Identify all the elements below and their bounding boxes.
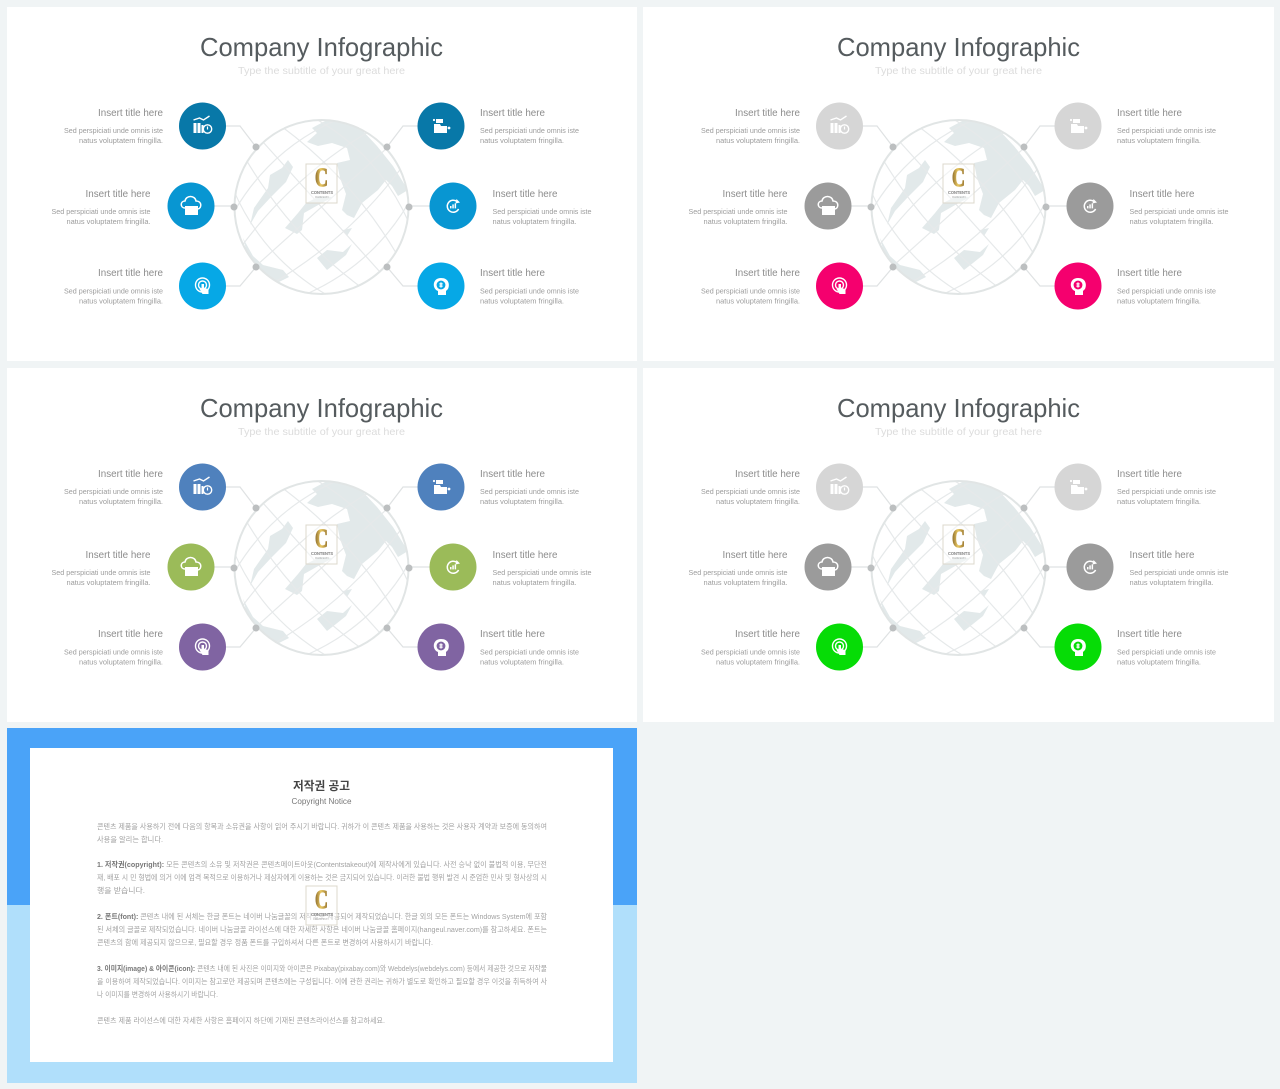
logo — [306, 524, 337, 564]
item: middle right: Insert title here — [492, 189, 558, 200]
item: bottom right — [418, 262, 579, 310]
logo — [943, 524, 974, 564]
copyright body text: 사용을 알리는 합니다. — [97, 834, 163, 844]
item: bottom left — [701, 624, 863, 670]
item: bottom right: Sed perspiciati unde omnis iste — [1117, 286, 1216, 296]
item: bottom left: natus voluptatem fringilla. — [716, 658, 800, 666]
panel: slide 1 blue variant — [7, 7, 637, 361]
item: top left — [701, 102, 863, 150]
logo: CONTENTS — [311, 551, 333, 556]
item: bottom left: Insert title here — [98, 268, 163, 279]
item: middle left: Sed perspiciati unde omnis iste — [52, 568, 150, 577]
subtitle: Type the subtitle of your great here — [238, 426, 405, 438]
item: middle left — [52, 182, 214, 230]
item: top right — [1054, 464, 1216, 510]
title: Company Infographic — [200, 393, 443, 423]
logo: C — [952, 163, 965, 192]
item: top left: Sed perspiciati unde omnis iste — [701, 126, 800, 135]
item: bottom right — [1054, 624, 1216, 670]
copyright body text: 3. 이미지(image) & 아이콘(icon): 콘텐츠 내에 된 사진은 이미지와 아이콘은 Pixabay(pixabay.com)와 Webdelys(webdelys.com) 등에서 제공한 것으로 저작물 — [97, 963, 547, 973]
item: middle right: natus voluptatem fringilla. — [1130, 578, 1214, 587]
logo: CONTENTS — [311, 912, 333, 917]
logo: MADE EASY — [952, 556, 966, 560]
item: middle left: natus voluptatem fringilla. — [704, 578, 788, 587]
copyright body text: 행을 받습니다. — [97, 885, 145, 895]
item: bottom right: Insert title here — [480, 629, 545, 640]
item: middle right: natus voluptatem fringilla. — [492, 217, 576, 226]
item: top left: Sed perspiciati unde omnis iste — [701, 487, 800, 496]
item: top right: Insert title here — [1117, 469, 1182, 480]
item: middle right — [1066, 544, 1228, 590]
logo: CONTENTS — [948, 190, 970, 195]
copyright body text: 2. 폰트(font): 콘텐츠 내에 된 서체는 한글 폰트는 네이버 나눔글꼴의 저작물로 제공되어 제작되었습니다. 한글 외의 모든 폰트는 Windows System에 포함 — [97, 911, 547, 921]
item: bottom left: natus voluptatem fringilla. — [79, 658, 163, 666]
item: middle left: natus voluptatem fringilla. — [704, 217, 788, 226]
item: middle right: natus voluptatem fringilla. — [492, 578, 576, 587]
logo: MADE EASY — [315, 917, 329, 921]
item: top right: Sed perspiciati unde omnis iste — [480, 126, 579, 135]
item: top left: natus voluptatem fringilla. — [79, 136, 163, 145]
connector nodes — [230, 504, 412, 632]
item: top left: natus voluptatem fringilla. — [79, 497, 163, 506]
item: top left: Insert title here — [735, 469, 800, 480]
item: bottom right: Sed perspiciati unde omnis iste — [1117, 648, 1216, 656]
title: Company Infographic — [200, 32, 443, 62]
item: middle right: Sed perspiciati unde omnis iste — [1130, 568, 1228, 577]
item: top right — [418, 464, 579, 510]
item: bottom left: Sed perspiciati unde omnis iste — [701, 286, 800, 296]
item: top right: natus voluptatem fringilla. — [1117, 136, 1201, 145]
connector lines — [851, 126, 1067, 286]
item: middle left — [688, 182, 852, 230]
item: top left: Sed perspiciati unde omnis iste — [64, 126, 163, 135]
item: top right: Sed perspiciati unde omnis iste — [480, 487, 579, 496]
item: middle right: natus voluptatem fringilla. — [1130, 217, 1214, 226]
item: top left: Insert title here — [735, 108, 800, 119]
copyright body text — [97, 821, 547, 1025]
subtitle: Type the subtitle of your great here — [875, 426, 1042, 438]
item: top left: natus voluptatem fringilla. — [716, 136, 800, 145]
logo — [306, 163, 337, 203]
item: top right: natus voluptatem fringilla. — [480, 497, 564, 506]
item: bottom right: natus voluptatem fringilla. — [1117, 658, 1201, 666]
item: middle right — [430, 544, 592, 590]
item: bottom right: Insert title here — [1117, 629, 1182, 640]
item: middle right: Insert title here — [492, 550, 558, 561]
item: middle right: Sed perspiciati unde omnis iste — [492, 568, 592, 577]
item: top right — [1054, 102, 1216, 150]
copyright body text: 1. 저작권(copyright): 모든 콘텐츠의 소유 및 저작권은 콘텐츠메이트아웃(Contentstakeout)에 제작사에게 있습니다. 사전 승낙 없이 불법적 이용, 무단전 — [97, 859, 547, 869]
logo: C — [952, 524, 965, 553]
title: Company Infographic — [837, 393, 1080, 423]
title: Company Infographic — [837, 32, 1080, 62]
item: bottom right: natus voluptatem fringilla. — [480, 296, 564, 306]
connector nodes — [868, 144, 1050, 270]
logo: C — [315, 885, 328, 914]
copyright subheading: Copyright Notice — [292, 796, 352, 806]
copyright body text: 을 이용하여 제작되었습니다. 이미지는 참고로만 제공되며 콘텐츠에는 구성됩니다. 이에 관한 권리는 귀하가 별도로 확인하고 필요할 경우 이것을 취득하여 사 — [97, 976, 547, 986]
copyright body text: 콘텐츠 제품 라이선스에 대한 자세한 사항은 홈페이지 하단에 기재된 콘텐츠라이선스를 참고하세요. — [97, 1015, 385, 1025]
item: top left — [701, 464, 863, 510]
item: middle right — [430, 182, 592, 230]
item: top right: Insert title here — [480, 108, 545, 119]
item: middle right: Insert title here — [1130, 550, 1195, 561]
logo: MADE EASY — [952, 195, 966, 199]
copyright body text: 나 이미지를 변경하여 사용하시기 바랍니다. — [97, 989, 218, 999]
panel: copyright notice slide — [7, 728, 637, 1083]
item: top right — [418, 102, 579, 150]
connector lines — [214, 487, 430, 647]
logo — [306, 885, 337, 925]
item: bottom right: Insert title here — [480, 268, 545, 279]
copyright body text: 콘텐츠 제품을 사용하기 전에 다음의 항목과 소유권을 사항이 읽어 주시기 바랍니다. 귀하가 이 콘텐츠 제품을 사용하는 것은 사용자 계약과 보증에 동의하여 — [97, 821, 547, 831]
item: bottom left — [64, 624, 226, 670]
item: bottom left: Sed perspiciati unde omnis iste — [64, 648, 163, 656]
item: middle left — [688, 544, 852, 590]
item: middle left: Sed perspiciati unde omnis iste — [688, 568, 788, 577]
item: top right: Insert title here — [480, 469, 545, 480]
copyright body text: 재, 배포 시 민 형법에 의거 이에 엄격 목적으로 이용하거나 제삼자에게 이용하는 것은 금지되어 있습니다. 이러한 불법 행위 발견 시 준엄한 민사 및 형사상의 시 — [97, 872, 547, 882]
item: top left: Insert title here — [98, 469, 163, 480]
item: bottom right — [1054, 262, 1216, 310]
item: bottom right: natus voluptatem fringilla. — [1117, 296, 1201, 306]
item: top right: Sed perspiciati unde omnis iste — [1117, 487, 1216, 496]
subtitle: Type the subtitle of your great here — [238, 65, 405, 77]
item: bottom right: natus voluptatem fringilla. — [480, 658, 564, 666]
item: bottom left — [701, 262, 863, 310]
item: bottom right: Insert title here — [1117, 268, 1182, 279]
item: bottom left: Sed perspiciati unde omnis iste — [64, 286, 163, 296]
globe graphic — [192, 438, 451, 698]
item: top right: natus voluptatem fringilla. — [480, 136, 564, 145]
connector lines — [214, 126, 430, 286]
connector nodes — [230, 144, 412, 270]
item: top left — [64, 102, 226, 150]
connector lines — [851, 487, 1067, 647]
item: middle left: Insert title here — [722, 189, 788, 200]
item: bottom left: natus voluptatem fringilla. — [79, 296, 163, 306]
item: middle left: natus voluptatem fringilla. — [66, 217, 150, 226]
item: bottom left — [64, 262, 226, 310]
item: middle right: Sed perspiciati unde omnis iste — [1130, 207, 1228, 216]
globe graphic — [829, 77, 1088, 337]
copyright heading: 저작권 공고 — [293, 778, 350, 793]
item: top left: natus voluptatem fringilla. — [716, 497, 800, 506]
item: middle left: Sed perspiciati unde omnis iste — [688, 207, 788, 216]
item: bottom left: Insert title here — [735, 629, 800, 640]
logo: MADE EASY — [315, 195, 329, 199]
logo: MADE EASY — [315, 556, 329, 560]
item: top right: natus voluptatem fringilla. — [1117, 497, 1201, 506]
globe graphic — [829, 438, 1088, 698]
panel: slide 4 gray and green variant — [643, 368, 1274, 722]
item: middle left: Insert title here — [86, 189, 151, 200]
item: top left: Sed perspiciati unde omnis iste — [64, 487, 163, 496]
globe graphic — [192, 77, 451, 337]
item: middle left: Insert title here — [722, 550, 788, 561]
logo — [943, 163, 974, 203]
subtitle: Type the subtitle of your great here — [875, 65, 1042, 77]
item: middle right: Insert title here — [1130, 189, 1195, 200]
panel: slide 3 blue green purple variant — [7, 368, 637, 722]
logo: C — [315, 524, 328, 553]
item: bottom left: Insert title here — [98, 629, 163, 640]
item: bottom right — [418, 624, 579, 670]
item: middle left: Sed perspiciati unde omnis iste — [52, 207, 150, 216]
connector nodes — [868, 504, 1050, 632]
item: middle left — [52, 544, 214, 590]
item: top right: Insert title here — [1117, 108, 1182, 119]
item: middle right: Sed perspiciati unde omnis iste — [492, 207, 592, 216]
item: top left — [64, 464, 226, 510]
item: top left: Insert title here — [98, 108, 163, 119]
item: bottom left: Sed perspiciati unde omnis iste — [701, 648, 800, 656]
item: bottom left: Insert title here — [735, 268, 800, 279]
item: middle left: Insert title here — [86, 550, 151, 561]
item: top right: Sed perspiciati unde omnis iste — [1117, 126, 1216, 135]
item: middle right — [1066, 182, 1228, 230]
logo: C — [315, 163, 328, 192]
item: bottom right: Sed perspiciati unde omnis iste — [480, 648, 579, 656]
copyright body text: 콘텐츠의 함에 제공되지 않으므로, 필요할 경우 정품 폰트를 구입하셔서 다른 폰트로 변경하여 사용하시기 바랍니다. — [97, 937, 433, 947]
item: bottom right: Sed perspiciati unde omnis iste — [480, 286, 579, 296]
item: middle left: natus voluptatem fringilla. — [66, 578, 150, 587]
logo: CONTENTS — [311, 190, 333, 195]
copyright body text: 된 서체의 글꼴로 제작되었습니다. 네이버 나눔글꼴 라이선스에 대한 자세한 사항은 네이버 나눔글꼴 홈페이지(hangeul.naver.com)를 참고하세요. 폰트는 — [97, 924, 547, 934]
item: bottom left: natus voluptatem fringilla. — [716, 296, 800, 306]
panel: slide 2 gray and pink variant — [643, 7, 1274, 361]
logo: CONTENTS — [948, 551, 970, 556]
